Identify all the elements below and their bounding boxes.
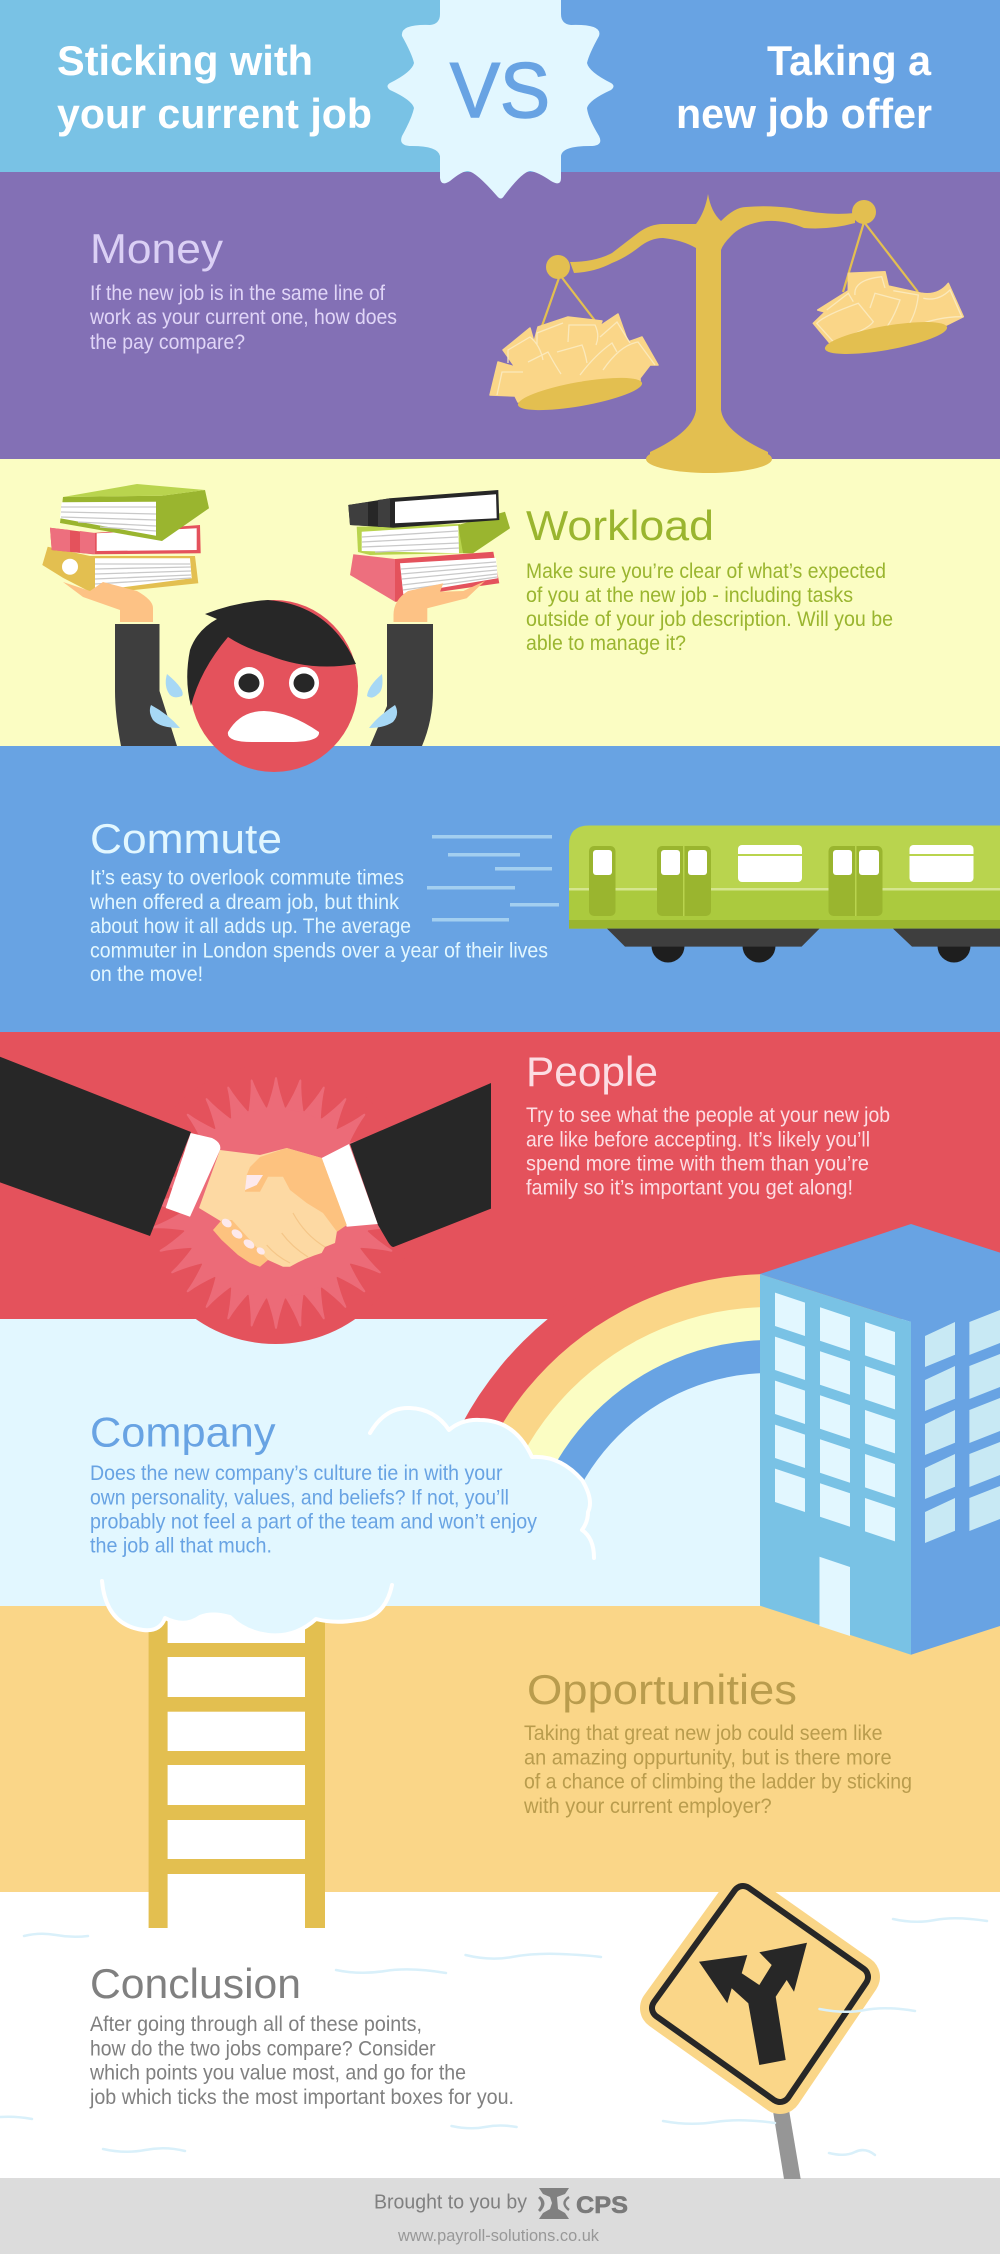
- title: left option: Sticking with: [57, 37, 313, 84]
- panel: commute text: [89, 815, 548, 986]
- icon: road sign: [662, 1896, 858, 2179]
- right pile of notes: [813, 272, 963, 361]
- icon: ladder: [149, 1610, 325, 1928]
- decorative ground waves: [0, 1918, 987, 2155]
- icon: CPS logo: [538, 2188, 569, 2219]
- icon: speed lines: [427, 835, 559, 922]
- footer: brought to you by: Brought to you by: [374, 2192, 527, 2214]
- panel: people text: spend more time with them than you’re: [526, 1153, 869, 1176]
- panel: opportunities text: of a chance of climbing the ladder by sticking: [524, 1771, 912, 1794]
- panel: conclusion text: how do the two jobs compare? Consider: [90, 2037, 436, 2060]
- panel: opportunities text: Opportunities: [527, 1666, 797, 1713]
- panel: workload text: outside of your job description. Will you be: [526, 608, 893, 631]
- panel: commute text: about how it all adds up. The average: [90, 915, 411, 938]
- panel: workload text: Workload: [526, 502, 714, 549]
- panel: conclusion text: which points you value most, and go for the: [89, 2062, 466, 2085]
- panel: company text: probably not feel a part of the team and won’t enjoy: [90, 1511, 537, 1534]
- panel: opportunities text: [523, 1666, 912, 1818]
- title: right option: [676, 37, 932, 137]
- panel: company text: own personality, values, and beliefs? If not, you’ll: [90, 1486, 509, 1510]
- panel: company text: the job all that much.: [90, 1535, 272, 1558]
- panel: opportunities text: an amazing oppurtunity, but is there more: [524, 1747, 892, 1770]
- right face windows: [925, 1310, 1000, 1543]
- icon: rainbow: [464, 1274, 762, 1480]
- panel: commute text: It’s easy to overlook commute times: [90, 866, 404, 890]
- VS starburst badge: [388, 0, 614, 198]
- footer: brought to you by: [374, 2188, 628, 2219]
- right hand: [394, 581, 485, 622]
- panel: opportunities text: with your current employer?: [523, 1795, 772, 1818]
- left face windows: [775, 1293, 895, 1636]
- panel: money text: the pay compare?: [90, 331, 245, 354]
- title: left option: your current job: [57, 90, 372, 137]
- panel: money text: [89, 225, 397, 354]
- panel: money text: If the new job is in the same line of: [90, 282, 385, 305]
- pink burst: [150, 1077, 402, 1329]
- panel: workload text: Make sure you’re clear of what’s expected: [526, 560, 886, 583]
- icon: stressed worker holding books: [42, 484, 510, 772]
- face with hair, eyes and mouth: [187, 600, 358, 772]
- title: right option: new job offer: [676, 90, 932, 137]
- panel: workload text: [526, 502, 893, 655]
- panel: opportunities text: Taking that great new job could seem like: [524, 1722, 883, 1745]
- icon: cloud: [102, 1408, 594, 1635]
- panel: workload text: able to manage it?: [526, 632, 686, 655]
- left arm: [115, 624, 177, 746]
- panel: money text: Money: [90, 225, 223, 272]
- VS starburst badge: VS: [450, 46, 550, 134]
- icon: green train: [569, 826, 1000, 963]
- panel: conclusion text: job which ticks the most important boxes for you.: [89, 2086, 514, 2109]
- icon: balance scale with money: [490, 194, 963, 473]
- fork arrow: [699, 1943, 807, 2065]
- panel: commute text: Commute: [90, 815, 282, 862]
- panel: money text: work as your current one, how does: [89, 306, 397, 329]
- left hand: [63, 582, 153, 622]
- panel: company text: [90, 1408, 537, 1558]
- footer: website url: www.payroll-solutions.co.uk: [397, 2227, 600, 2245]
- panel: workload text: of you at the new job - including tasks: [526, 584, 853, 607]
- title: right option: Taking a: [767, 37, 932, 84]
- title: left option: [57, 37, 372, 137]
- panel: people text: People: [526, 1048, 658, 1095]
- right arm: [370, 624, 433, 746]
- panel: commute text: when offered a dream job, but think: [89, 891, 399, 914]
- panel: conclusion text: Conclusion: [90, 1960, 301, 2007]
- panel: conclusion text: After going through all of these points,: [90, 2013, 422, 2036]
- footer: brought to you by: CPS: [576, 2192, 628, 2219]
- panel: commute text: commuter in London spends over a year of their lives: [90, 940, 548, 962]
- left pile of notes: [490, 314, 658, 417]
- panel: commute text: on the move!: [90, 963, 203, 986]
- panel: company text: Company: [90, 1408, 276, 1456]
- panel: people text: [526, 1048, 890, 1200]
- icon: office building: [760, 1224, 1000, 1655]
- left book stack: [42, 484, 209, 592]
- sweat drops: [150, 674, 397, 728]
- panel: conclusion text: [89, 1960, 514, 2109]
- panel: people text: family so it’s important you get along!: [526, 1177, 853, 1200]
- right book stack: [348, 490, 510, 602]
- panel: people text: are like before accepting. It’s likely you’ll: [526, 1128, 870, 1152]
- icon: handshake with burst: [0, 1057, 491, 1344]
- clasped hands: [199, 1148, 347, 1267]
- sleeves and cuffs: [0, 1057, 491, 1247]
- panel: company text: Does the new company’s culture tie in with your: [90, 1462, 502, 1485]
- panel: people text: Try to see what the people at your new job: [526, 1104, 890, 1127]
